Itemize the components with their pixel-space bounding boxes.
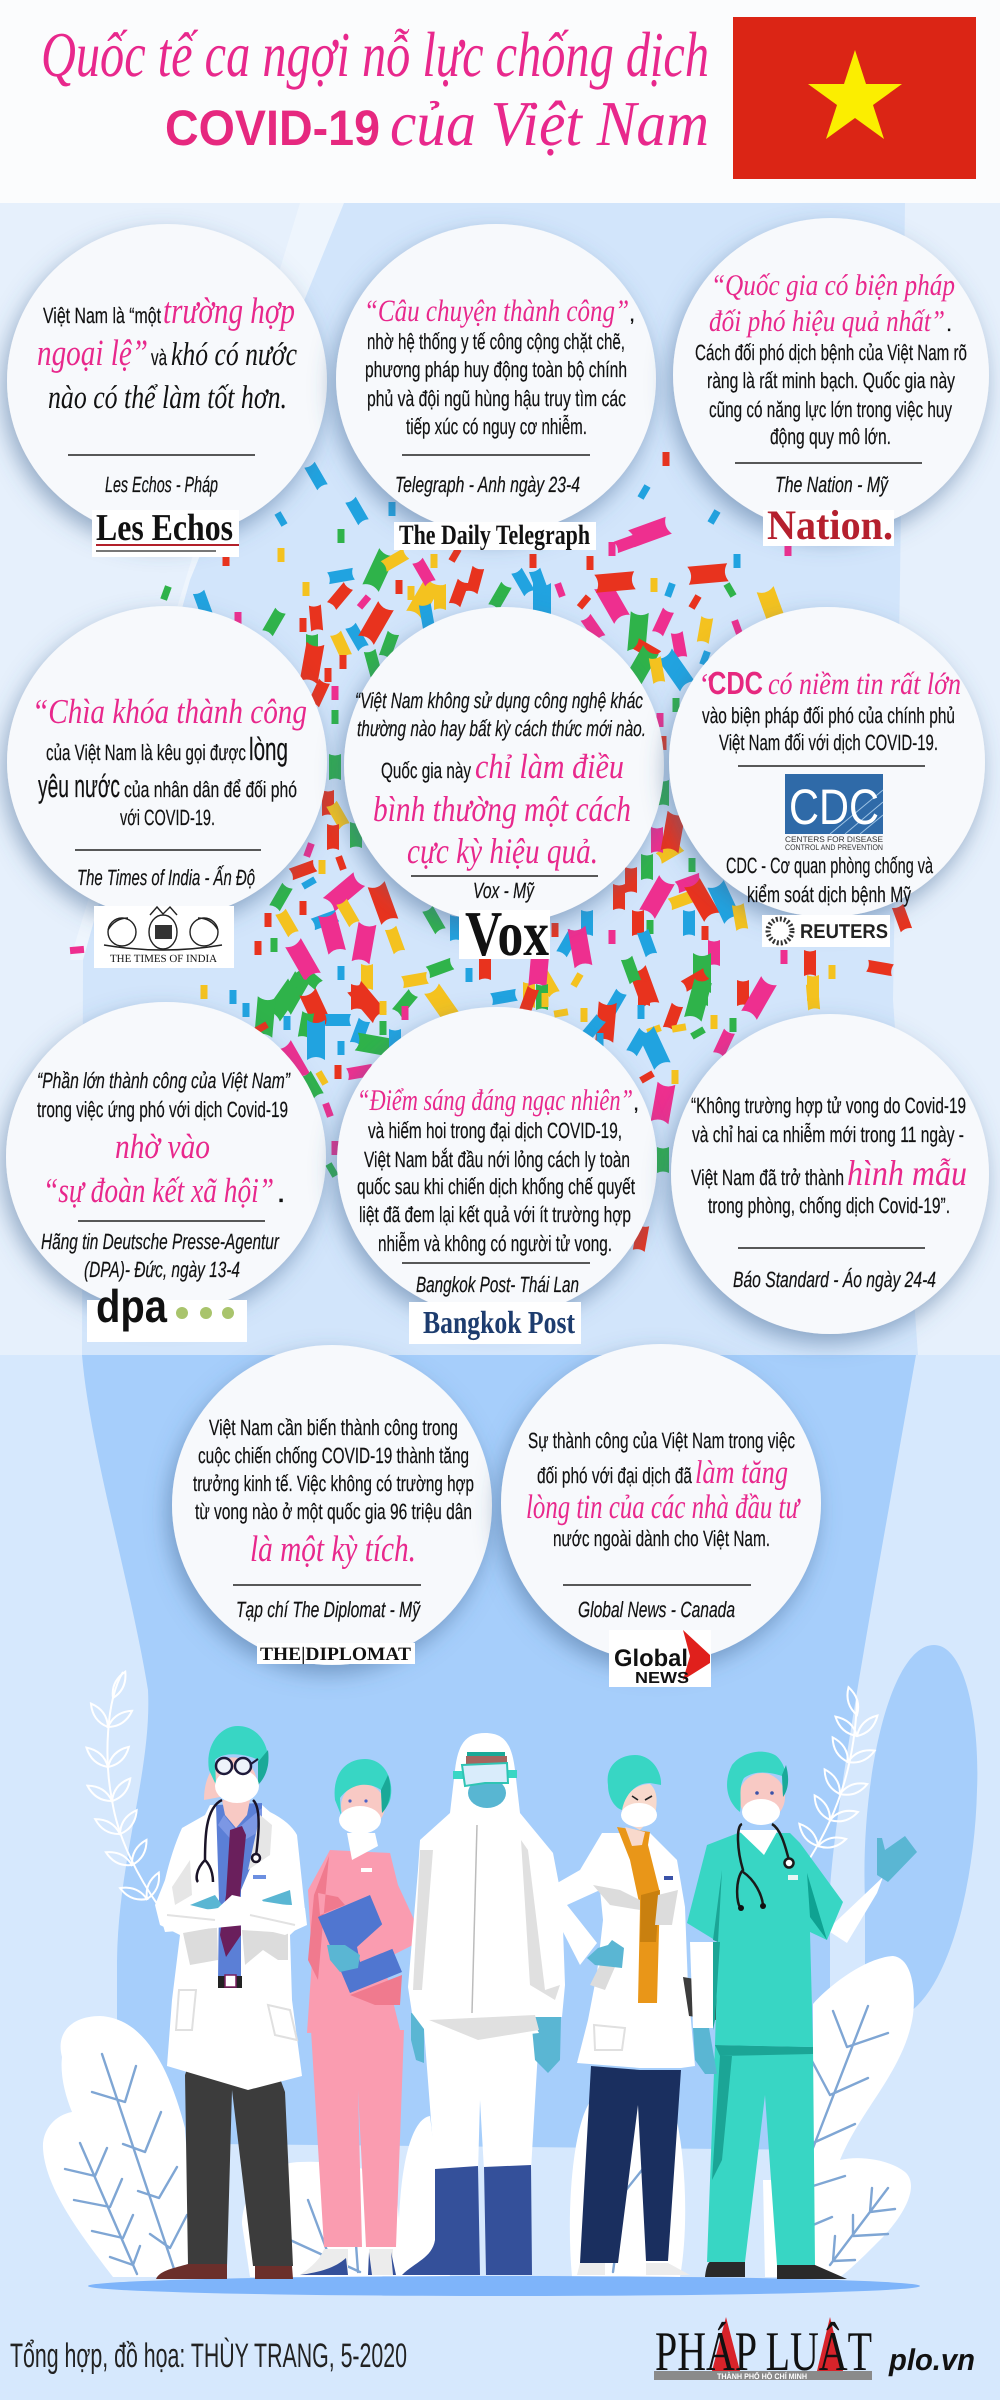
panel: Telegraph: “Câu chuyện thành công” xyxy=(364,293,629,328)
panel: Vox: bình thường một cách xyxy=(373,789,631,829)
panel: Bangkok Post: quốc sau khi chiến dịch khống chế quyết xyxy=(357,1174,635,1199)
decoration: left bush xyxy=(43,2016,195,2277)
logo: Bangkok Post xyxy=(409,1302,581,1344)
panel: The Diplomat: trưởng kinh tế. Việc không có trường hợp xyxy=(193,1471,474,1496)
figure: protective suit xyxy=(402,1733,565,2275)
decoration: right bush xyxy=(763,1956,914,2277)
panel: Global News: làm tăng xyxy=(695,1455,788,1491)
panel: The Nation: “Quốc gia có biện pháp xyxy=(711,269,955,302)
logo: The Times of India xyxy=(94,906,234,968)
panel: Bangkok Post xyxy=(337,1007,657,1344)
panel: Les Echos: ngoại lệ” xyxy=(37,333,148,374)
logo: The Times of India: THE TIMES OF INDIA xyxy=(110,953,217,965)
background: upper panel xyxy=(0,203,1000,1355)
panel: Times of India: “Chìa khóa thành công xyxy=(32,692,307,731)
credit line: Tổng hợp, đồ họa: THÙY TRANG, 5-2020 xyxy=(10,2337,407,2375)
panel: The Nation: động quy mô lớn. xyxy=(770,424,891,449)
panel: The Diplomat: từ vong nào ở một quốc gia 96 triệu dân xyxy=(195,1499,472,1524)
panel: Global News: đối phó với đại dịch đã xyxy=(537,1463,693,1488)
panel: Global News: lòng tin của các nhà đầu tư xyxy=(526,1489,801,1526)
decoration: right sprig xyxy=(796,1686,881,1858)
panel: DPA: . xyxy=(278,1182,284,1207)
panel: Vox: cực kỳ hiệu quả. xyxy=(407,831,598,871)
icon: Vietnam flag xyxy=(733,17,976,179)
panel: Telegraph: tiếp xúc có nguy cơ nhiễm. xyxy=(406,414,587,439)
panel: Standard xyxy=(671,1014,989,1334)
logo: Pháp Luật: PHÁP LUẬT xyxy=(655,2321,872,2383)
panel: Times of India: của nhân dân để đối phó xyxy=(124,777,297,802)
logo: Reuters: REUTERS xyxy=(800,921,888,943)
illustration: healthcare workers xyxy=(43,1670,920,2296)
figure: nurse in green xyxy=(687,1752,917,2279)
logo: The Diplomat: THE|DIPLOMAT xyxy=(260,1644,411,1665)
logo: The Nation: Nation. xyxy=(767,503,893,549)
title: COVID-19 xyxy=(165,100,380,156)
panel: DPA xyxy=(6,1002,326,1342)
panel: CDC: “ xyxy=(698,668,715,701)
panel: Telegraph: , xyxy=(629,301,635,326)
panel: Global News: Sự thành công của Việt Nam trong việc xyxy=(528,1428,795,1453)
panel: Telegraph: phương pháp huy động toàn bộ chính xyxy=(365,357,627,382)
logo: Bangkok Post: Bangkok Post xyxy=(423,1304,575,1341)
figure: woman doctor in white coat xyxy=(543,1755,723,2275)
panel: DPA: trong việc ứng phó với dịch Covid-19 xyxy=(37,1097,288,1122)
decoration: left sprig xyxy=(83,1670,163,1908)
title: Quốc tế ca ngợi nỗ lực chống dịch xyxy=(41,19,709,90)
logo: CDC: CONTROL AND PREVENTION xyxy=(785,843,883,852)
panel: Vox: “Việt Nam không sử dụng công nghệ khác xyxy=(355,688,643,713)
panel: Standard: hình mẫu xyxy=(847,1153,967,1193)
logo: Les Echos: Les Echos xyxy=(96,507,233,549)
logo: Vox: Vox xyxy=(465,898,549,969)
panel: Bangkok Post: nhiễm và không có người tử vong. xyxy=(378,1231,612,1256)
panel: Vox: Quốc gia này xyxy=(381,758,471,783)
panel: Times of India: lòng xyxy=(249,731,288,767)
logo: CDC: CDC xyxy=(789,779,879,835)
panel: DPA: (DPA)- Đức, ngày 13-4 xyxy=(84,1257,240,1282)
panel: DPA: “Phần lớn thành công của Việt Nam” xyxy=(37,1068,291,1093)
logo: Pháp Luật: THÀNH PHỐ HỒ CHÍ MINH xyxy=(717,2371,807,2381)
confetti xyxy=(70,452,912,1252)
panel: Les Echos: Việt Nam là “một xyxy=(43,303,161,328)
figure: doctor with glasses xyxy=(155,1726,307,2279)
panel: Bangkok Post: và hiếm hoi trong đại dịch COVID-19, xyxy=(368,1118,622,1143)
logo: Global News: NEWS xyxy=(635,1670,689,1687)
panel: Telegraph: Telegraph - Anh ngày 23-4 xyxy=(395,472,580,497)
title: của Việt Nam xyxy=(390,88,709,159)
panel: Les Echos: khó có nước xyxy=(171,337,297,373)
panel: Telegraph: phủ và đội ngũ hùng hậu truy tìm các xyxy=(367,386,626,411)
panel: Telegraph xyxy=(336,224,656,551)
panel: Telegraph: nhờ hệ thống y tế công cộng chặt chẽ, xyxy=(367,329,625,354)
panel: Global News: nước ngoài dành cho Việt Nam. xyxy=(553,1526,770,1551)
panel: The Diplomat: cuộc chiến chống COVID-19 thành tăng xyxy=(198,1443,469,1468)
panel: CDC: có niềm tin rất lớn xyxy=(768,666,961,701)
panel: Bangkok Post: , xyxy=(633,1090,639,1115)
logo: dpa xyxy=(87,1280,247,1342)
panel: CDC: CDC xyxy=(708,665,763,701)
figure: nurse in pink xyxy=(300,1759,418,2275)
panel: Vox: chỉ làm điều xyxy=(475,747,624,786)
panel: Bangkok Post: Việt Nam bắt đầu nới lỏng cách ly toàn xyxy=(364,1147,630,1172)
decoration: mid bushes xyxy=(242,2093,685,2277)
panel: Times of India: với COVID-19. xyxy=(120,805,215,830)
background: deep blue shape xyxy=(82,1355,916,2150)
logo: CDC: CENTERS FOR DISEASE xyxy=(785,835,883,844)
panel: Bangkok Post: liệt đã đem lại kết quả với ít trường hợp xyxy=(359,1202,631,1227)
panel: Les Echos xyxy=(7,224,327,557)
panel: The Nation: The Nation - Mỹ xyxy=(775,472,889,497)
panel: Les Echos: trường hợp xyxy=(163,291,295,332)
panel: DPA: “sự đoàn kết xã hội” xyxy=(43,1171,274,1210)
panel: Les Echos: nào có thể làm tốt hơn. xyxy=(48,380,287,416)
site address: plo.vn xyxy=(888,2344,975,2377)
panel: The Diplomat: là một kỳ tích. xyxy=(250,1529,416,1570)
panel: DPA: Hãng tin Deutsche Presse-Agentur xyxy=(41,1229,280,1254)
panel: The Diplomat: Việt Nam cần biến thành công trong xyxy=(209,1415,458,1440)
logo: Global News xyxy=(609,1630,711,1687)
panel: The Diplomat xyxy=(172,1345,492,1665)
ground ellipse xyxy=(88,2276,920,2296)
panel: The Nation: đối phó hiệu quả nhất” xyxy=(709,305,945,338)
logo: Pháp Luật xyxy=(654,2317,872,2383)
panel: DPA: nhờ vào xyxy=(115,1127,210,1166)
panel: The Nation: . xyxy=(946,311,952,336)
panel: Times of India xyxy=(7,606,327,968)
panel: Bangkok Post: “Điểm sáng đáng ngạc nhiên” xyxy=(357,1084,633,1117)
panel: Times of India: The Times of India - Ấn Độ xyxy=(77,865,255,890)
panel: Vox: thường nào hay bất kỳ cách thức mới nào. xyxy=(357,716,646,741)
panel: The Diplomat: Tạp chí The Diplomat - Mỹ xyxy=(236,1597,421,1622)
logo: CDC xyxy=(785,774,883,852)
panel: CDC xyxy=(669,607,985,947)
panel: Times of India: yêu nước xyxy=(38,768,120,804)
panel: The Nation xyxy=(673,218,989,549)
panel: Vox xyxy=(344,607,664,969)
panel: Times of India: của Việt Nam là kêu gọi được xyxy=(46,740,246,765)
panel: CDC: kiểm soát dịch bệnh Mỹ xyxy=(747,882,911,907)
header band xyxy=(0,0,1000,203)
panel: Vox: Vox - Mỹ xyxy=(473,878,535,903)
panel: Global News xyxy=(501,1344,821,1687)
panel: Global News: Global News - Canada xyxy=(578,1597,735,1622)
logo: Reuters xyxy=(762,915,890,947)
panel: Les Echos: Les Echos - Pháp xyxy=(105,472,218,497)
panel: Standard: Việt Nam đã trở thành xyxy=(691,1165,844,1190)
background: right blob xyxy=(864,1645,977,2015)
logo: Global News: Global xyxy=(614,1645,688,1672)
title xyxy=(41,19,709,159)
panel: Les Echos: và xyxy=(151,345,168,370)
logo: The Daily Telegraph: The Daily Telegraph xyxy=(399,520,590,551)
logo: dpa: dpa xyxy=(96,1280,167,1332)
panel: Bangkok Post: Bangkok Post- Thái Lan xyxy=(416,1272,579,1297)
